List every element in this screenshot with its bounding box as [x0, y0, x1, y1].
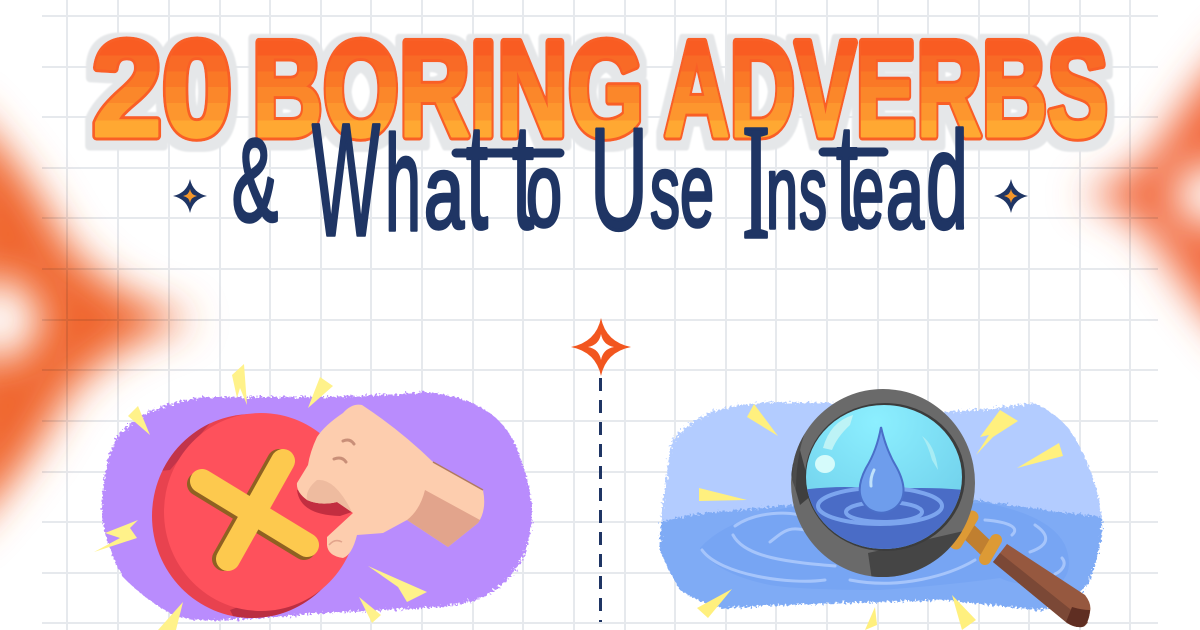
- subtitle: & What to Use Instead: d: [926, 104, 968, 258]
- title: 20 Boring Adverbs: BORING: [252, 13, 644, 165]
- subtitle: & What to Use Instead: h: [385, 108, 421, 259]
- subtitle: & What to Use Instead: o: [526, 132, 562, 249]
- subtitle: & What to Use Instead: a: [424, 134, 464, 251]
- ripples: [702, 513, 1064, 583]
- puddle: [700, 503, 1069, 590]
- icon: centre orange star: [571, 318, 631, 376]
- subtitle: & What to Use Instead: U: [590, 98, 648, 260]
- centre dashed divider: [599, 378, 602, 622]
- subtitle: & What to Use Instead: t: [836, 92, 858, 260]
- title: 20 Boring Adverbs: [92, 13, 1108, 165]
- finger shadow: [297, 490, 352, 516]
- illustration: wrong adverb, hand pressing red X button: [94, 364, 532, 630]
- subtitle: & What to Use Instead: s: [650, 133, 680, 250]
- hand: [297, 405, 484, 558]
- blue brush background: [660, 402, 1102, 610]
- lens frame: [790, 389, 985, 580]
- title: 20 Boring Adverbs: 20: [92, 13, 232, 165]
- red button: [152, 413, 353, 618]
- purple brush background: [102, 392, 532, 621]
- subtitle: & What to Use Instead: s: [799, 134, 827, 251]
- title: 20 Boring Adverbs: BORING: [252, 13, 644, 165]
- subtitle: & What to Use Instead: e: [852, 133, 884, 250]
- icon: right sparkle: [994, 179, 1028, 213]
- sparks: [94, 364, 427, 630]
- subtitle: & What to Use Instead: t: [466, 92, 488, 260]
- subtitle: & What to Use Instead: [232, 90, 968, 273]
- subtitle: & What to Use Instead: e: [680, 132, 714, 249]
- illustration: right adverb, magnifying glass over water drop: [660, 389, 1102, 630]
- subtitle: & What to Use Instead: I: [742, 90, 770, 273]
- subtitle: & What to Use Instead: n: [766, 134, 798, 251]
- icon: left sparkle: [173, 179, 207, 213]
- handle: [956, 517, 1090, 627]
- lens glass with drop: [806, 405, 962, 549]
- subtitle: & What to Use Instead: W: [312, 90, 380, 269]
- water surface: [660, 500, 1102, 610]
- water drop: [860, 427, 904, 513]
- title: 20 Boring Adverbs: 20: [92, 13, 232, 165]
- sparks: [697, 404, 1063, 630]
- yellow X mark: [199, 461, 307, 559]
- decorative blurred orange star: left: [0, 100, 195, 540]
- subtitle: & What to Use Instead: &: [232, 115, 278, 247]
- decorative blurred orange star: right: [1080, 30, 1200, 355]
- subtitle: & What to Use Instead: a: [886, 134, 924, 251]
- subtitle: & What to Use Instead: t: [512, 92, 534, 260]
